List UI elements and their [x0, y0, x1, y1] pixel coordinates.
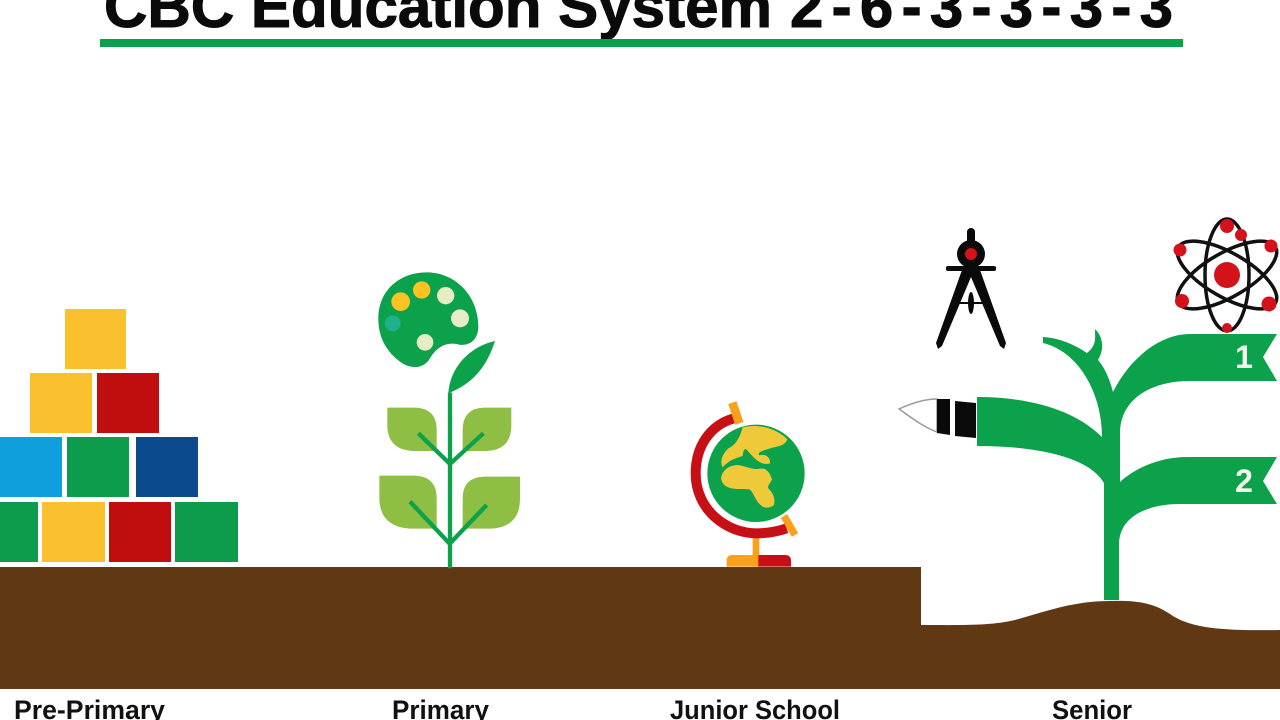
icon: pencil tip — [899, 399, 976, 438]
ribbon number 2: 2 — [1235, 463, 1253, 499]
icon: stacked building blocks — [0, 309, 238, 562]
icon: primary plant with palette — [378, 272, 520, 568]
title underline — [100, 39, 1183, 47]
icon: atom — [1168, 219, 1280, 333]
soil ground — [0, 567, 1280, 689]
title — [104, 0, 1173, 40]
ribbon number 1: 1 — [1235, 339, 1253, 375]
icon: drawing compass — [936, 228, 1006, 349]
icon: senior plant with ribbons — [977, 329, 1277, 600]
icon: desk globe — [696, 403, 805, 567]
